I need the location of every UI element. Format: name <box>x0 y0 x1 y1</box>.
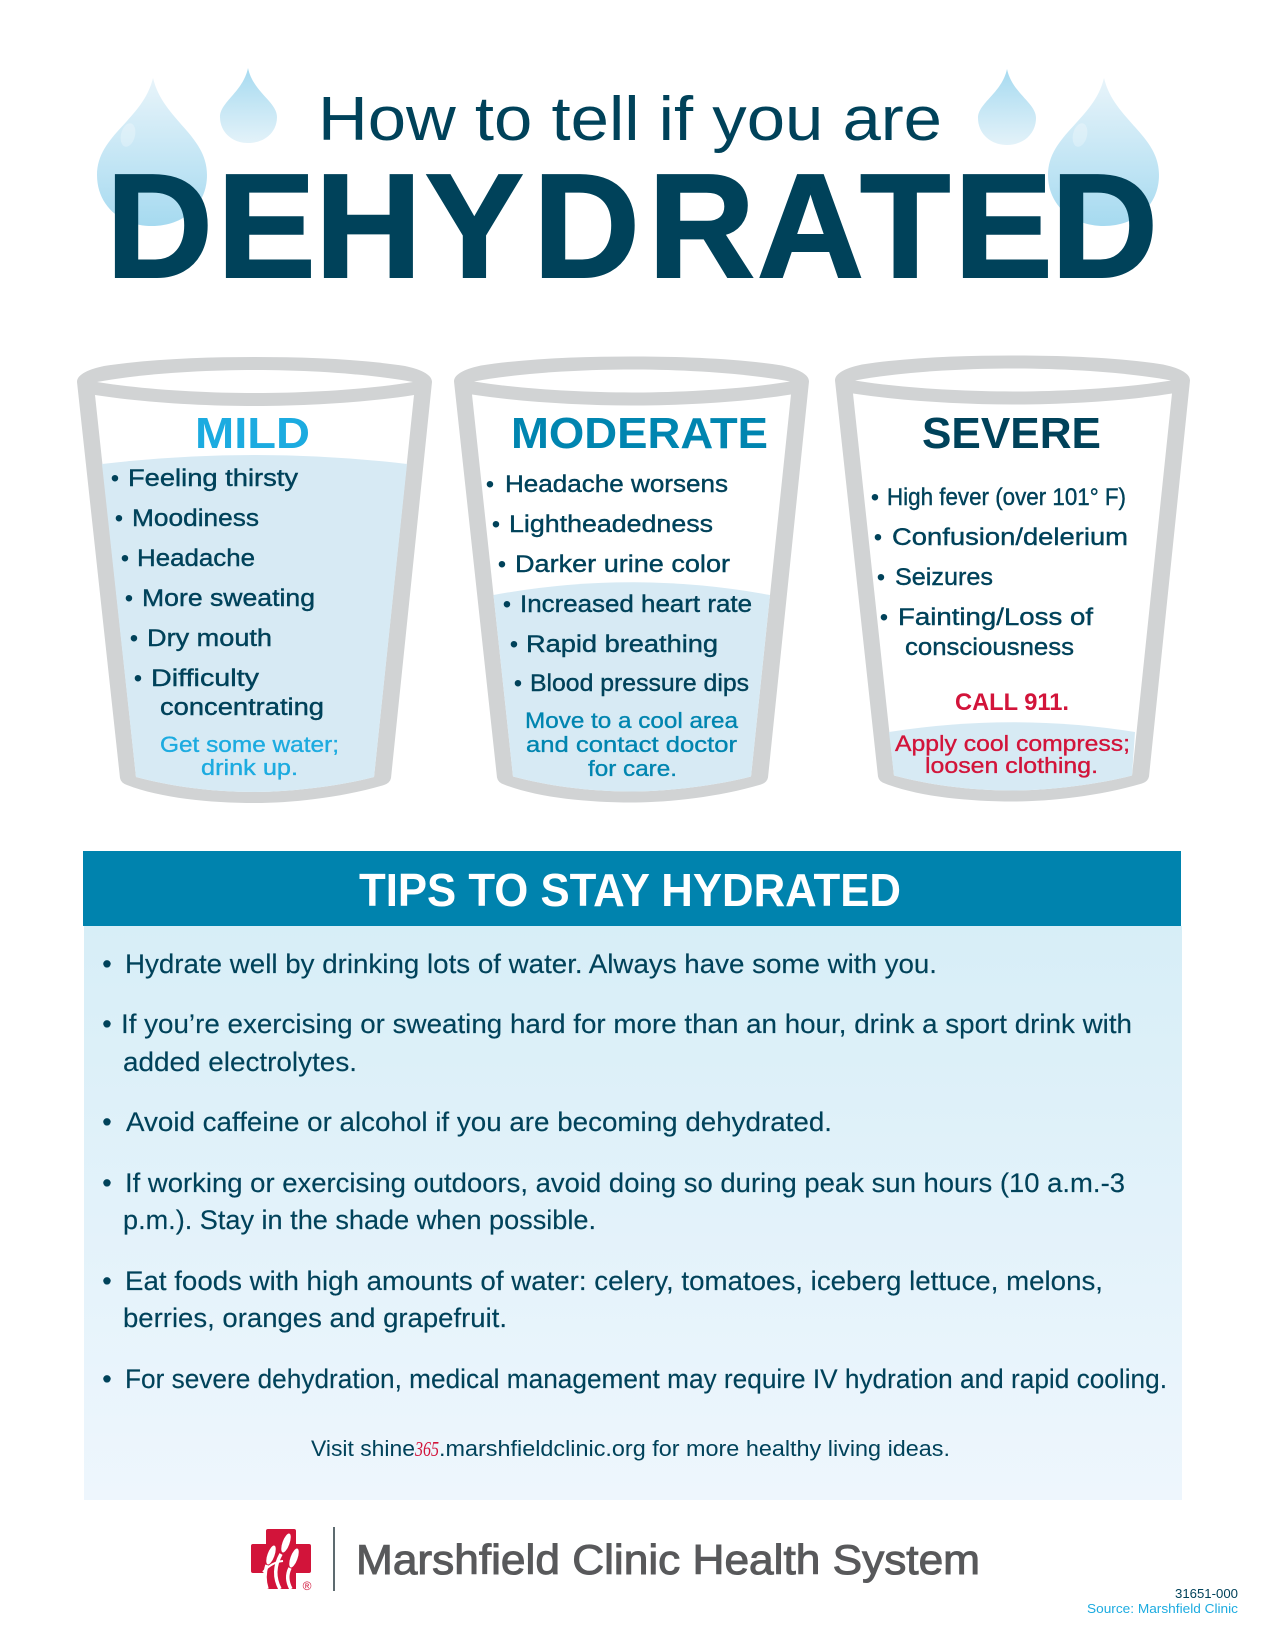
visit website line: 365 <box>414 1437 439 1461</box>
logo: marshfield cross <box>251 1529 312 1593</box>
visit website line: Visit shine <box>311 1436 415 1461</box>
symptom list: severe: • <box>877 564 885 591</box>
symptom list: severe: High fever (over 101° F) <box>887 484 1126 511</box>
symptom list: mild: • <box>125 585 133 612</box>
action text: severe: Apply cool compress; <box>895 731 1130 756</box>
tip: peak sun hours: • <box>102 1168 112 1198</box>
action text: moderate: for care. <box>588 756 677 781</box>
symptom list: severe: consciousness <box>905 634 1074 661</box>
tips background <box>84 926 1182 1500</box>
tip: peak sun hours <box>102 1168 1125 1235</box>
icon: large water drop left <box>97 78 207 226</box>
symptom list: moderate: • <box>514 670 522 697</box>
symptom list: moderate: Blood pressure dips <box>530 670 749 697</box>
symptom list: moderate: Increased heart rate <box>520 591 752 618</box>
symptom list: moderate: Lightheadedness <box>509 511 713 538</box>
tip: sport drink <box>102 1009 1132 1077</box>
tip: peak sun hours: p.m.). Stay in the shade when possible. <box>123 1205 596 1235</box>
tip: foods with water: Eat foods with high amounts of water: celery, tomatoes, iceberg lettuce, melons, <box>125 1266 1103 1296</box>
symptom list: severe: • <box>874 524 882 551</box>
callout: call 911: CALL 911. <box>955 689 1069 716</box>
glass outline <box>77 357 432 803</box>
action text: severe: loosen clothing. <box>925 753 1098 778</box>
symptom list: mild: Moodiness <box>132 505 259 532</box>
tip: sport drink: added electrolytes. <box>123 1047 357 1077</box>
water level <box>102 455 407 792</box>
symptom list: mild: Dry mouth <box>147 625 272 652</box>
title: DEHYDRATED: DEHYDRATED <box>106 144 1158 309</box>
document number: 31651-000 <box>1175 1586 1238 1601</box>
tip: foods with water: berries, oranges and grapefruit. <box>123 1303 507 1333</box>
tip: foods with water: • <box>102 1266 112 1296</box>
symptom list: severe: • <box>880 604 888 631</box>
cattail stems <box>263 1554 291 1589</box>
tip: hydrate well: Hydrate well by drinking lots of water. Always have some with you. <box>125 949 937 979</box>
icon: large water drop right <box>1048 78 1159 226</box>
symptom list: mild: • <box>130 625 138 652</box>
symptom list: mild: Feeling thirsty <box>128 465 298 492</box>
tip: avoid caffeine: Avoid caffeine or alcohol if you are becoming dehydrated. <box>126 1107 832 1137</box>
panel: mild glass <box>77 357 432 803</box>
action text: moderate: Move to a cool area <box>525 708 739 733</box>
symptom list: severe: • <box>871 484 879 511</box>
symptom list: severe <box>871 484 1128 661</box>
action text: moderate <box>525 708 739 781</box>
heading: tips: TIPS TO STAY HYDRATED <box>359 864 901 916</box>
symptom list: moderate: Darker urine color <box>515 551 730 578</box>
tip: hydrate well: • <box>102 949 112 979</box>
heading: mild: MILD <box>195 410 310 458</box>
tip: avoid caffeine: • <box>102 1107 112 1137</box>
tip: severe dehydration: • <box>102 1364 112 1394</box>
symptom list: mild: • <box>121 545 129 572</box>
tip: sport drink: If you’re exercising or sweating hard for more than an hour, drink a sport drink with <box>121 1009 1132 1039</box>
heading: severe: SEVERE <box>922 410 1101 458</box>
tips header bar <box>83 851 1181 926</box>
logo wordmark: Marshfield Clinic Health System <box>356 1536 980 1583</box>
glass outline <box>454 356 809 802</box>
symptom list: mild: • <box>111 465 119 492</box>
icon: small water drop left <box>220 68 277 143</box>
title: How to tell if you are: How to tell if you are <box>318 85 942 154</box>
symptom list: mild: Difficulty <box>151 665 259 692</box>
action text: mild <box>160 732 339 780</box>
cattail heads <box>264 1532 301 1569</box>
icon: small water drop right <box>978 69 1036 145</box>
registered mark: ® <box>303 1579 312 1593</box>
symptom list: moderate: Headache worsens <box>505 471 728 498</box>
symptom list: mild: More sweating <box>142 585 315 612</box>
symptom list: severe: Seizures <box>895 564 993 591</box>
tip: foods with water <box>102 1266 1103 1333</box>
action text: moderate: and contact doctor <box>526 732 738 757</box>
action text: mild: drink up. <box>201 755 298 780</box>
action text: mild: Get some water; <box>160 732 339 757</box>
symptom list: moderate: • <box>510 631 518 658</box>
symptom list: mild <box>111 465 324 721</box>
symptom list: moderate <box>486 471 752 697</box>
symptom list: mild: • <box>115 505 123 532</box>
symptom list: severe: Confusion/delerium <box>892 524 1128 551</box>
symptom list: mild: concentrating <box>160 694 324 721</box>
symptom list: moderate: • <box>503 591 511 618</box>
symptom list: moderate: Rapid breathing <box>526 631 718 658</box>
water level <box>889 722 1135 790</box>
symptom list: moderate: • <box>498 551 506 578</box>
symptom list: severe: Fainting/Loss of <box>898 604 1093 631</box>
panel: moderate glass <box>454 356 809 802</box>
tip: severe dehydration: For severe dehydration, medical management may require IV hydration and rapid cooling. <box>125 1364 1167 1394</box>
tip: sport drink: • <box>102 1009 112 1039</box>
heading: moderate: MODERATE <box>511 410 768 458</box>
tip: peak sun hours: If working or exercising outdoors, avoid doing so during peak sun hours (10 a.m.-3 <box>125 1168 1125 1198</box>
source credit: Source: Marshfield Clinic <box>1087 1601 1239 1616</box>
symptom list: mild: Headache <box>137 545 255 572</box>
action text: severe <box>895 731 1130 778</box>
panel: tips to stay hydrated <box>83 851 1182 1500</box>
visit website line: .marshfieldclinic.org for more healthy living ideas. <box>439 1436 950 1461</box>
symptom list: moderate: • <box>492 511 500 538</box>
water level <box>494 582 770 792</box>
panel: severe glass <box>835 356 1190 802</box>
glass outline <box>835 356 1190 802</box>
symptom list: moderate: • <box>486 471 494 498</box>
logo divider <box>333 1527 335 1591</box>
symptom list: mild: • <box>134 665 142 692</box>
